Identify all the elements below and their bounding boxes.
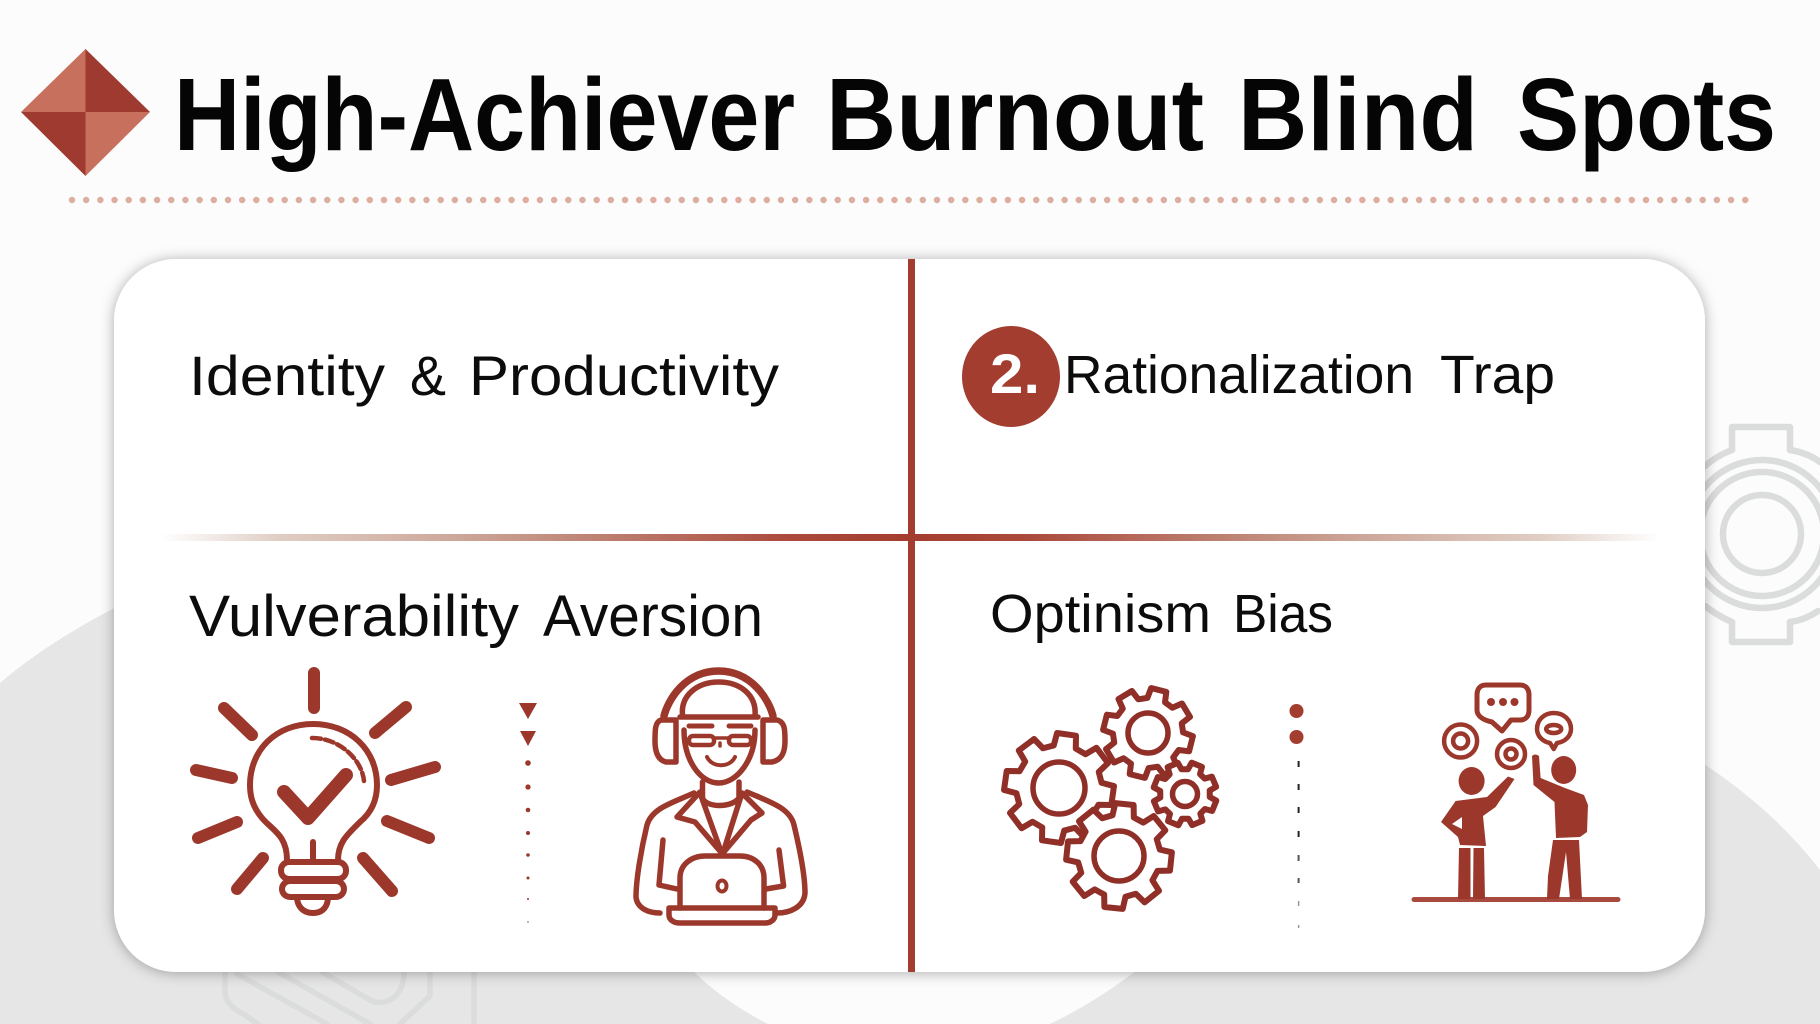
horizontal divider <box>160 534 1660 541</box>
number badge 2: 2. <box>990 342 1040 405</box>
title: Spots <box>1517 57 1776 172</box>
title: Blind <box>1238 57 1478 172</box>
title icon: diamond <box>21 49 150 176</box>
gear: bottom <box>1062 799 1176 913</box>
heading: vulverability aversion: Aversion <box>543 584 763 649</box>
icon: person with headphones and laptop <box>636 671 805 923</box>
heading: rationalization trap: Trap <box>1440 345 1555 405</box>
gear: large left <box>998 727 1120 849</box>
person left <box>1441 767 1514 899</box>
person right <box>1532 754 1588 899</box>
heading: identity and productivity: Productivity <box>469 344 779 407</box>
heading: rationalization trap: Rationalization <box>1064 345 1414 405</box>
background gear, right <box>1688 427 1820 642</box>
background gear shape, bottom <box>225 972 474 1024</box>
heading: optinism bias: Bias <box>1233 584 1333 644</box>
vertical divider <box>908 259 915 972</box>
title: Burnout <box>826 57 1204 172</box>
heading: optinism bias: Optinism <box>990 584 1211 644</box>
title: High-Achiever <box>174 57 795 172</box>
heading: identity and productivity: & <box>410 344 446 407</box>
arrow: triangles and fading dots <box>519 703 537 923</box>
speech bubble <box>1477 685 1529 731</box>
ground line <box>1414 897 1618 902</box>
reaction circles <box>1444 713 1571 768</box>
heading: vulverability aversion: Vulverability <box>189 584 519 649</box>
panel: main card <box>114 259 1705 972</box>
gear: small right <box>1144 753 1226 835</box>
gear: top <box>1094 679 1202 787</box>
icon: four gears <box>998 679 1226 913</box>
arrow: dots and fading dashes <box>1290 704 1304 928</box>
number badge 2 <box>962 326 1060 427</box>
icon: two people with speech bubbles <box>1414 685 1618 900</box>
heading: identity and productivity: Identity <box>189 344 385 407</box>
icon: light bulb with check mark <box>196 673 435 913</box>
dotted divider <box>72 197 1746 203</box>
